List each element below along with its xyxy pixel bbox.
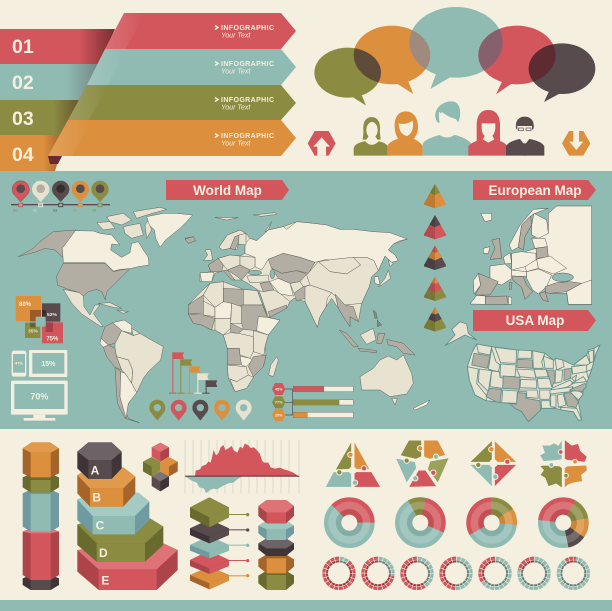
- Java: [358, 348, 377, 353]
- hex teal: [258, 521, 294, 540]
- Philippines: [373, 310, 382, 327]
- Alaska: [445, 322, 477, 346]
- bar olive: 77%: [275, 401, 283, 405]
- speech bubble olive: [314, 48, 381, 106]
- world map: Americas: [18, 207, 195, 423]
- Benelux: [503, 253, 512, 264]
- layer A: A: [91, 463, 100, 477]
- Sweden: [230, 235, 239, 250]
- Iraq and Syria: [260, 282, 274, 292]
- Chile: [115, 367, 139, 423]
- Sulawesi: [377, 333, 385, 343]
- Chad: [231, 303, 242, 323]
- segmented ring 6: [517, 556, 551, 590]
- Russia: [245, 222, 407, 271]
- Poland and Czechia: [525, 259, 538, 272]
- donut chart 1: [326, 499, 373, 546]
- Baltics: [532, 238, 547, 248]
- pyramid 1: [424, 184, 446, 208]
- Caspian Sea: [270, 269, 275, 279]
- layer B: B: [92, 490, 101, 504]
- Iceland: [481, 213, 492, 222]
- teal layer: [190, 536, 229, 558]
- US land base: [467, 344, 600, 422]
- layer C: C: [96, 518, 105, 532]
- gear puzzle: [539, 439, 587, 488]
- overlapping percentage squares: [16, 296, 63, 343]
- speech bubble red: [478, 26, 556, 94]
- DR Congo: [223, 333, 253, 358]
- Kazakhstan: [268, 253, 315, 273]
- continental land base: [509, 206, 592, 304]
- Mozambique: [248, 355, 266, 377]
- lettered hex stack: [77, 442, 178, 590]
- heading: USA Map: [473, 310, 596, 331]
- ribbon 4: Your Text: [221, 140, 251, 148]
- pin cream: 02: [33, 208, 37, 212]
- pin red: 01: [13, 208, 17, 212]
- hex olive: [258, 571, 294, 590]
- person red: [468, 110, 508, 156]
- segmented ring 3: [398, 554, 436, 592]
- timeline axis: [11, 204, 110, 205]
- isometric layer stack with arrows: [190, 497, 249, 589]
- ribbon 3: INFOGRAPHIC: [221, 97, 274, 104]
- flag olive: [177, 359, 192, 394]
- Arabia: [259, 290, 290, 317]
- column segment dark: [23, 575, 59, 590]
- olive layer: [190, 497, 229, 527]
- heading: USA Map: USA Map: [506, 313, 564, 328]
- square 35%: 35%: [28, 329, 39, 335]
- cube red: [152, 443, 169, 462]
- cube dark: [152, 472, 169, 491]
- heading: World Map: [166, 180, 289, 200]
- population area chart: [185, 440, 299, 493]
- column segment orange: [23, 442, 59, 477]
- triangle puzzle: [325, 441, 381, 487]
- Eastern Europe: [240, 256, 255, 270]
- Germany and central Europe: [218, 255, 240, 270]
- Algeria: [485, 296, 508, 304]
- speech bubbles and people: [308, 7, 595, 156]
- icon: up arrow hexagon: [308, 131, 336, 156]
- Western Europe: [208, 258, 223, 272]
- Balkans: [227, 265, 250, 280]
- Arctic islands north of Russia: [215, 213, 277, 232]
- tab 04: 04: [12, 144, 34, 166]
- hex orange: [258, 554, 294, 573]
- tab 04: [0, 135, 66, 171]
- Portugal: [473, 273, 481, 294]
- person olive: [354, 117, 388, 156]
- ribbon 1: [105, 13, 296, 49]
- Black Sea: [248, 270, 262, 275]
- arrow orange: [229, 574, 249, 577]
- Peru: [103, 345, 122, 370]
- Turkey: [545, 282, 582, 293]
- tab 02: [0, 64, 98, 100]
- South Africa: [230, 375, 253, 392]
- ribbon 2: INFOGRAPHIC: [221, 61, 274, 68]
- pin orange: 04: [73, 208, 77, 212]
- hexagonal column: [23, 442, 59, 590]
- bar chart: [272, 383, 353, 421]
- USA map: [445, 322, 600, 422]
- Greenland: [147, 213, 193, 247]
- tablet 15%: 15%: [41, 361, 56, 368]
- Spain: [475, 273, 498, 295]
- layer B: [77, 467, 135, 507]
- 3D charts: [23, 440, 299, 590]
- Switzerland and Austria: [512, 270, 527, 277]
- Korea: [374, 277, 380, 285]
- Central African Republic: [231, 323, 243, 333]
- Egypt: [243, 289, 263, 305]
- segmented ring 2: [362, 557, 394, 589]
- Namibia and Botswana: [227, 365, 248, 382]
- tab 01: [0, 29, 115, 64]
- bar orange: 25%: [275, 413, 283, 417]
- map headings: [166, 180, 596, 331]
- India: [305, 285, 332, 327]
- Ethiopia and Somalia: [257, 317, 280, 335]
- Guinea coast: [188, 314, 215, 330]
- ribbon 1: INFOGRAPHIC: [221, 25, 274, 32]
- Algeria: [203, 282, 223, 307]
- Iceland small: [185, 237, 195, 243]
- pyramid 3: [424, 246, 446, 270]
- arrow olive: [229, 513, 249, 516]
- bar red: 45%: [275, 387, 283, 391]
- Africa countries: [188, 282, 280, 392]
- segmented ring 1: [320, 554, 358, 593]
- Ukraine: [536, 256, 567, 274]
- orange layer: [190, 567, 229, 589]
- ribbon 2: [87, 49, 296, 85]
- Alaska: [18, 230, 76, 257]
- Africa land base: [188, 282, 280, 392]
- speech bubble teal: [409, 7, 500, 89]
- Eurasia land base: [200, 222, 407, 327]
- Nigeria and Cameroon: [215, 318, 231, 335]
- Finland: [238, 233, 246, 245]
- pyramid 4: [424, 277, 446, 301]
- person orange: [387, 111, 423, 156]
- square 75%: 75%: [46, 337, 59, 343]
- Colombia: [101, 323, 122, 345]
- Zambia: [240, 356, 253, 367]
- cube orange: [160, 457, 178, 476]
- Iran: [269, 278, 293, 296]
- ribbon 2: Your Text: [221, 68, 251, 76]
- USA: [57, 263, 130, 300]
- arrow red: [229, 559, 249, 562]
- column segment red: [23, 528, 59, 580]
- Mexico and Central America: [63, 289, 103, 327]
- Sumatra: [339, 330, 358, 347]
- map pin red: [171, 400, 187, 421]
- Yemen: [268, 305, 287, 317]
- Sweden: [518, 216, 532, 250]
- flag red: [169, 352, 184, 394]
- layer C: [77, 493, 149, 534]
- flag dark: [202, 380, 217, 394]
- Brazil: [115, 331, 163, 393]
- Morocco: [188, 283, 210, 305]
- Finland: [532, 213, 548, 238]
- Argentina: [120, 372, 137, 418]
- Tunisia: [508, 297, 512, 304]
- United Kingdom: [490, 238, 502, 259]
- pin olive: 05: [92, 208, 96, 212]
- heading: European Map: European Map: [488, 183, 582, 198]
- Norway: [219, 230, 246, 250]
- layer A: [77, 442, 122, 479]
- Mauritania and Mali: [188, 295, 203, 314]
- heading: European Map: [473, 180, 596, 200]
- ribbon 4: INFOGRAPHIC: [221, 133, 274, 140]
- Spain: [200, 272, 214, 282]
- Japan: [378, 260, 393, 287]
- Turkey: [247, 275, 269, 283]
- hex red: [258, 500, 294, 523]
- hexagon puzzle: [395, 440, 449, 487]
- ribbon 4: [48, 120, 296, 156]
- Germany: [512, 252, 536, 270]
- footer band: [0, 600, 612, 611]
- Pakistan: [294, 285, 310, 301]
- map pin olive: [149, 400, 165, 421]
- map pin dark: [192, 400, 208, 421]
- Niger: [215, 302, 232, 318]
- Guianas: [132, 328, 140, 336]
- person dark with tie: [506, 117, 544, 156]
- flag cream: [194, 373, 209, 394]
- ribbon 1: Your Text: [221, 32, 251, 40]
- donut chart 3: [469, 500, 515, 546]
- France: [490, 264, 512, 285]
- Black Sea: [552, 273, 573, 282]
- pyramid 2: [424, 215, 446, 239]
- Madagascar: [269, 357, 278, 377]
- puzzle and donut charts: [320, 439, 592, 593]
- map pin orange: [214, 400, 230, 421]
- layer E: [77, 543, 178, 590]
- Afghanistan: [290, 282, 303, 293]
- Caucasus and Central Asia: [272, 268, 307, 283]
- Ecuador: [100, 338, 108, 347]
- column segment olive: [23, 474, 59, 492]
- world map: Old World: [185, 213, 430, 410]
- segmented ring 4: [442, 559, 470, 587]
- Balkans: [527, 269, 552, 294]
- New Guinea: [387, 339, 415, 355]
- speech bubble dark: [528, 43, 596, 102]
- Caribbean islands: [98, 303, 128, 313]
- column segment teal: [23, 489, 59, 532]
- Sudan: [242, 305, 267, 331]
- arrow teal: [229, 544, 249, 547]
- pin timeline legend: [11, 181, 110, 212]
- isometric cubes: [143, 443, 178, 491]
- New Zealand: [413, 400, 430, 410]
- Venezuela: [113, 320, 132, 333]
- red layer: [190, 551, 229, 574]
- layer D: D: [99, 546, 108, 560]
- Southeast Asia: [335, 294, 358, 327]
- China: [307, 257, 378, 305]
- Arctic islands: [97, 207, 167, 238]
- layer D: [77, 518, 163, 562]
- tab 03: [0, 100, 82, 135]
- cube olive: [143, 457, 160, 476]
- Angola: [227, 348, 243, 365]
- pyramid 5: [424, 307, 446, 332]
- person teal: [423, 101, 473, 156]
- donut chart 4: [540, 499, 587, 546]
- flags pins and bars: [149, 352, 353, 421]
- square 52%: 52%: [47, 312, 58, 318]
- monitor 70%: 70%: [30, 392, 48, 402]
- tab 03: 03: [12, 108, 34, 130]
- flag chart: [169, 352, 217, 394]
- numbered ribbon banner: [0, 13, 296, 171]
- Iceland: [185, 237, 196, 243]
- segmented ring 5: [476, 554, 514, 593]
- layer E: E: [101, 574, 109, 588]
- Middle East: [567, 280, 592, 304]
- UK: [203, 249, 213, 261]
- Norway: [509, 208, 548, 251]
- pyramids: [424, 184, 446, 332]
- Ireland: [483, 247, 490, 253]
- map pin cream: [236, 400, 252, 421]
- hex layer stack: [258, 500, 294, 590]
- heading: World Map: World Map: [193, 183, 262, 198]
- tab 01: 01: [12, 36, 34, 58]
- phone 47%: 47%: [15, 361, 23, 366]
- Greece: [539, 292, 548, 302]
- segmented ring 7: [554, 554, 592, 592]
- flag orange: [186, 366, 200, 394]
- pin dark: 03: [53, 208, 57, 212]
- donut chart 2: [398, 500, 443, 545]
- Bolivia and Paraguay: [117, 357, 133, 383]
- West Africa: [203, 301, 215, 317]
- icon: down arrow hexagon: [562, 130, 590, 156]
- ribbon 3: Your Text: [221, 104, 251, 112]
- European map: [470, 206, 592, 304]
- tab 02: 02: [12, 72, 34, 94]
- device icons: [11, 350, 68, 421]
- Borneo: [360, 328, 376, 344]
- Mongolia: [318, 257, 361, 274]
- Canada: [62, 231, 149, 271]
- ribbon 3: [68, 85, 296, 120]
- Australia: [360, 355, 413, 397]
- Libya: [223, 288, 243, 307]
- Belarus: [536, 247, 548, 258]
- Kenya and Tanzania: [253, 331, 268, 355]
- Italy: [512, 276, 533, 299]
- arrow dark: [229, 528, 249, 532]
- square 80%: 80%: [19, 302, 32, 308]
- Tasmania: [392, 398, 397, 405]
- diamond puzzle: [469, 440, 517, 487]
- Morocco: [470, 295, 485, 304]
- Sardinia: [509, 283, 512, 289]
- speech bubble orange: [354, 26, 430, 94]
- dark layer: [190, 519, 229, 543]
- Italy: [223, 270, 235, 280]
- map section background: [0, 171, 612, 429]
- hex dark: [258, 538, 294, 556]
